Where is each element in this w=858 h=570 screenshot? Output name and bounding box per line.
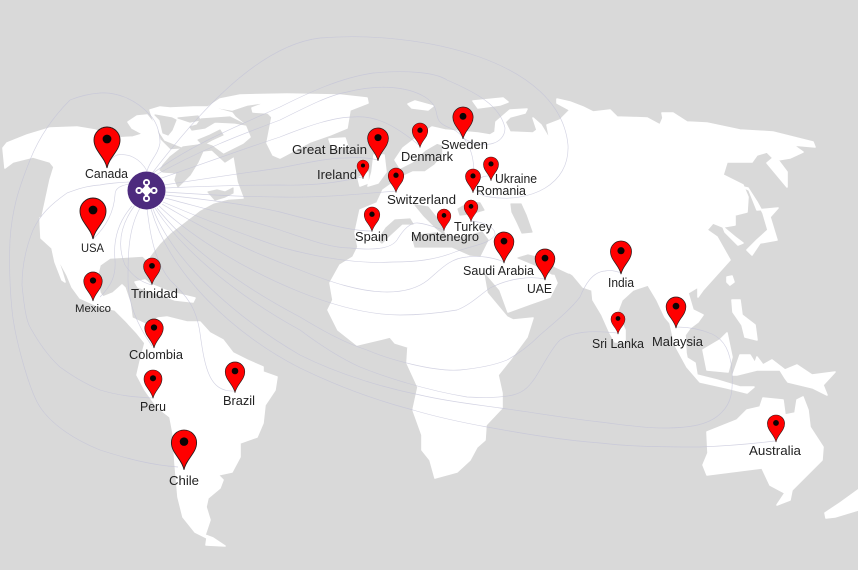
pin: Romania: Romania [476, 184, 526, 198]
pin: Turkey [454, 200, 493, 234]
pin: India [608, 241, 634, 290]
pin: Montenegro: Montenegro [411, 230, 479, 244]
pin: Sri Lanka [592, 312, 644, 351]
pin: Ukraine: Ukraine [495, 172, 537, 186]
pin: Saudi Arabia: Saudi Arabia [463, 264, 534, 278]
pin: Colombia [129, 319, 183, 362]
pin: Montenegro [411, 209, 479, 244]
pin: UAE: UAE [527, 282, 552, 296]
pin: Peru: Peru [140, 400, 166, 414]
pin: Spain [355, 207, 388, 244]
pin: Malaysia [652, 297, 703, 349]
pin: India: India [608, 276, 634, 290]
pin: Turkey: Turkey [454, 220, 493, 234]
pin: Sweden [441, 107, 488, 152]
pin: Colombia: Colombia [129, 348, 183, 362]
map: continents [3, 94, 858, 546]
pin: Ireland: Ireland [317, 168, 357, 182]
pin: Spain: Spain [355, 230, 388, 244]
pin: Ukraine [483, 157, 537, 186]
pin: Great Britain [292, 128, 388, 161]
pin: Denmark [401, 123, 454, 164]
pin: Canada [85, 127, 128, 181]
pin: Romania [465, 169, 526, 198]
pin: Malaysia: Malaysia [652, 335, 703, 349]
pin: Denmark: Denmark [401, 150, 454, 164]
pin: Trinidad: Trinidad [131, 287, 178, 301]
pin: UAE [527, 249, 555, 296]
pin: Switzerland: Switzerland [387, 193, 456, 207]
pin: Brazil: Brazil [223, 394, 255, 408]
pin: Australia: Australia [749, 444, 801, 458]
pin: Trinidad [131, 258, 178, 301]
pin: Switzerland [387, 168, 456, 207]
pin: Sri Lanka: Sri Lanka [592, 337, 644, 351]
pin: Australia [749, 415, 801, 458]
pin: USA: USA [81, 243, 104, 255]
pin: Mexico [75, 272, 111, 315]
pin: Mexico: Mexico [75, 303, 111, 315]
hub logo [128, 172, 166, 210]
pin: USA [80, 198, 106, 255]
pin: Sweden: Sweden [441, 138, 488, 152]
pin: Saudi Arabia [463, 232, 534, 278]
pin: Canada: Canada [85, 167, 128, 181]
pin: Great Britain: Great Britain [292, 143, 367, 157]
pin: Peru [140, 370, 166, 414]
pin: Chile [169, 430, 199, 488]
pin: Brazil [223, 362, 255, 408]
connection arcs from hub [10, 37, 775, 467]
pin: Ireland [317, 160, 369, 182]
pin: Chile: Chile [169, 474, 199, 488]
